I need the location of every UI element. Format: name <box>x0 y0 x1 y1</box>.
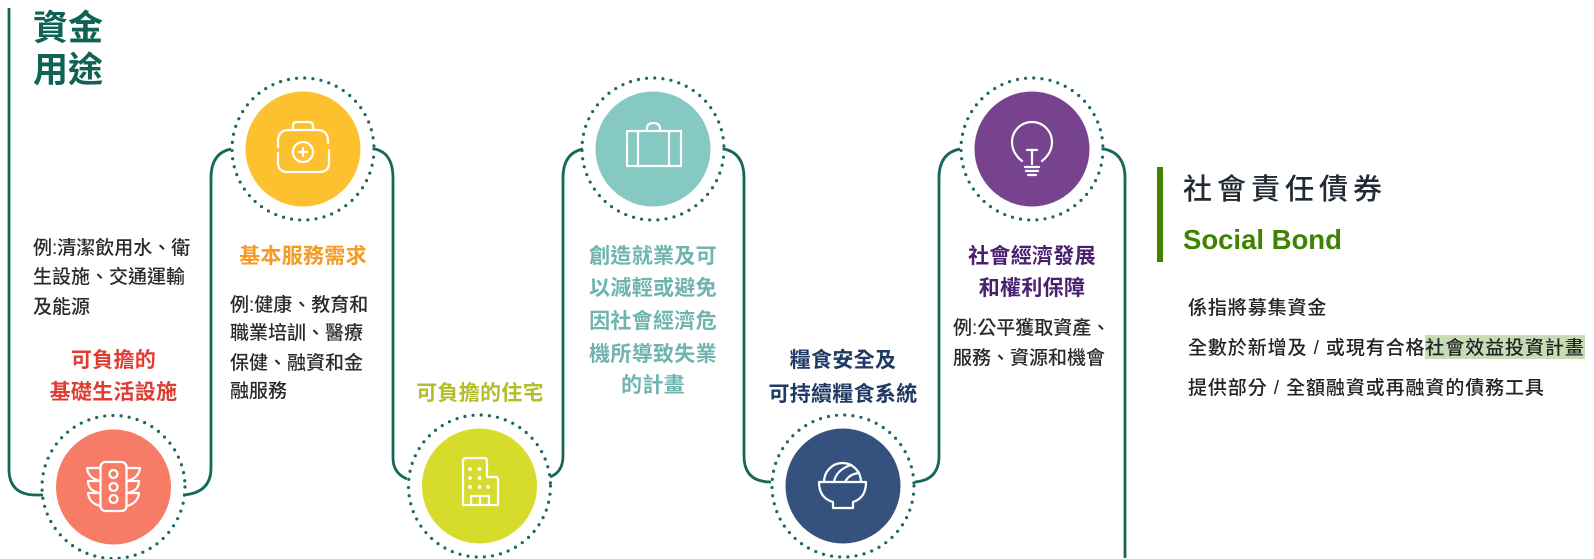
example text: 例:健康、教育和 <box>230 293 368 316</box>
example text: 例:清潔飲用水、衛 <box>33 237 190 259</box>
building windows <box>468 467 490 489</box>
heading: 糧食安全及 <box>790 348 896 372</box>
example text: 職業培訓、醫療 <box>230 322 363 344</box>
highlight <box>1425 335 1585 359</box>
heading: 以減輕或避免 <box>589 276 717 300</box>
description: 全數於新增及 / 或現有合格社會效益投資計畫 <box>1188 337 1585 359</box>
panel: affordable basic infrastructure <box>33 237 190 558</box>
heading <box>589 245 717 397</box>
example text: 生設施、交通運輸 <box>33 266 185 288</box>
icon: briefcase <box>582 78 724 220</box>
heading: 可負擔的住宅 <box>416 382 544 405</box>
title: 用途 <box>33 51 103 90</box>
heading <box>50 349 177 404</box>
example text: 例:公平獲取資產、 <box>953 317 1110 339</box>
heading: 因社會經濟危 <box>589 309 717 333</box>
heading: Chinese: 社會責任債券 <box>1183 173 1387 206</box>
description: 係指將募集資金 <box>1188 296 1327 319</box>
example text: 及能源 <box>33 296 90 318</box>
description <box>1188 296 1585 399</box>
example text: 融服務 <box>230 380 287 402</box>
heading <box>768 348 918 406</box>
icon: traffic light <box>42 416 185 558</box>
heading: 的計畫 <box>621 374 685 397</box>
heading: 機所導致失業 <box>589 343 717 366</box>
panel: basic services <box>230 78 374 402</box>
heading: 社會經濟發展 <box>968 244 1096 268</box>
heading: 可持續糧食系統 <box>768 382 918 406</box>
icon: medical bag <box>232 78 374 220</box>
example text <box>230 293 368 402</box>
panel: social bond definition <box>1157 167 1585 399</box>
example text: 服務、資源和機會 <box>953 347 1105 369</box>
panel: employment generation <box>582 78 724 397</box>
icon: building <box>408 415 550 557</box>
heading: 創造就業及可 <box>589 245 717 268</box>
icon: light bulb <box>961 78 1103 220</box>
heading: English: Social Bond <box>1183 224 1342 255</box>
heading: 可負擔的 <box>71 349 156 372</box>
title: 資金 <box>33 9 103 48</box>
panel: affordable housing <box>408 382 550 557</box>
heading: 基礎生活設施 <box>50 381 177 404</box>
panel: socioeconomic advancement <box>953 78 1110 369</box>
connecting line <box>9 8 1125 558</box>
panel: food security <box>768 348 918 557</box>
title <box>33 9 103 90</box>
example text <box>953 317 1110 369</box>
heading: 和權利保障 <box>979 277 1085 300</box>
description: 提供部分 / 全額融資或再融資的債務工具 <box>1188 377 1545 399</box>
icon: bowl <box>772 415 914 557</box>
accent bar <box>1157 167 1163 262</box>
heading: 基本服務需求 <box>239 245 367 268</box>
heading <box>968 244 1096 300</box>
example text: 保健、融資和金 <box>230 352 363 374</box>
example text <box>33 237 190 318</box>
